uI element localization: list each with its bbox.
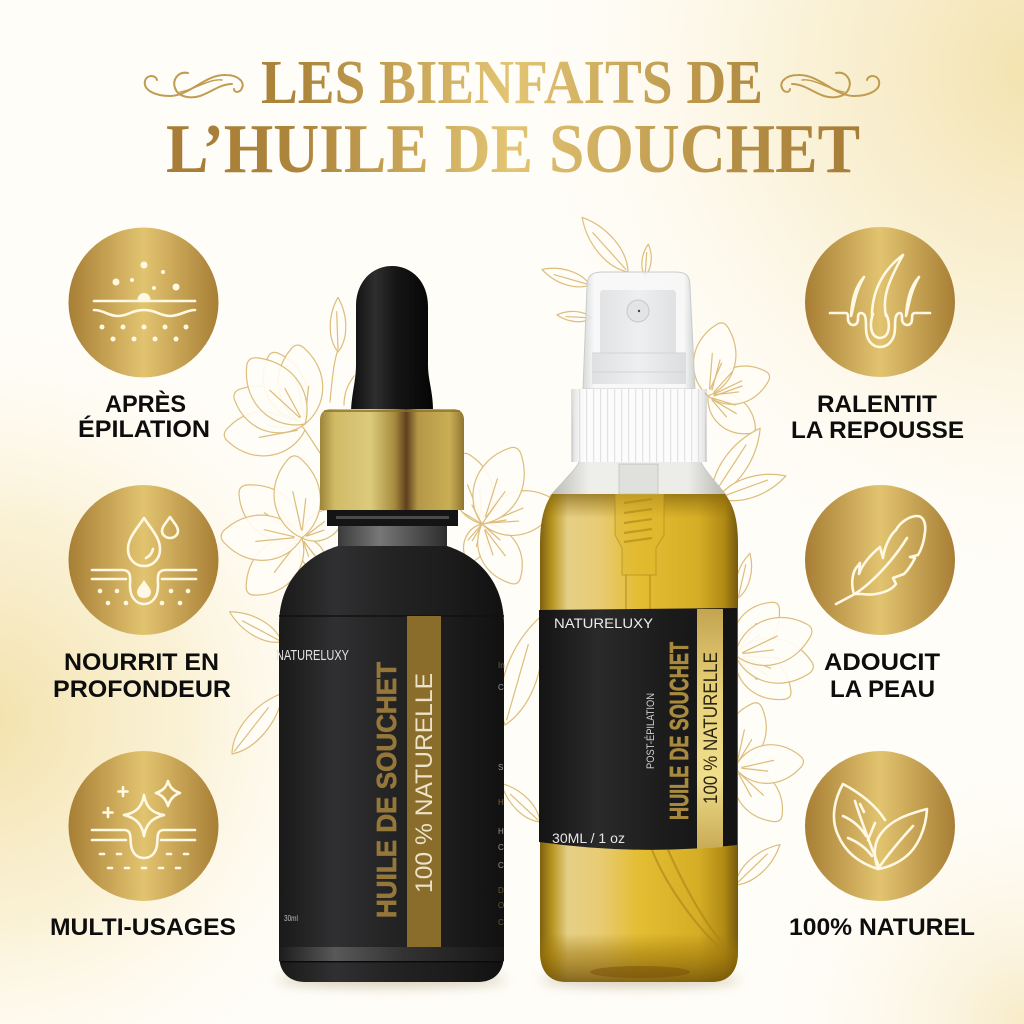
bottle text: 30ml (284, 914, 298, 923)
benefit: 100% naturel (789, 751, 975, 941)
icon: skin with pores (68, 228, 218, 378)
bottle shadows (277, 973, 740, 987)
title (166, 49, 860, 188)
label: ÉPILATION (78, 415, 210, 443)
icon: oil drops (68, 485, 218, 635)
flower: middle centre (444, 438, 562, 593)
label text (552, 615, 722, 846)
icon: feather (805, 485, 955, 635)
label (53, 649, 231, 703)
gold collar (320, 409, 464, 510)
flower: middle left (220, 454, 350, 608)
label text: 30ML / 1 oz (552, 830, 625, 846)
label (791, 391, 964, 444)
label: PROFONDEUR (53, 676, 231, 703)
bottle text: D (498, 886, 504, 895)
label: RALENTIT (817, 391, 937, 418)
bottle text: In (498, 661, 505, 670)
bottle text: HUILE DE SOUCHET (371, 662, 402, 918)
bottle text (276, 647, 505, 927)
label text: HUILE DE SOUCHET (664, 642, 694, 820)
benefit: ralentit la repousse (791, 227, 964, 444)
icon: hair follicles (805, 227, 955, 377)
bottle text: H (498, 798, 504, 807)
flower: lower right lower (716, 696, 805, 832)
ornament: right flourish (781, 73, 879, 97)
floral line art behind bottles (220, 211, 819, 891)
bottle text: 100 % NATURELLE (411, 673, 438, 893)
ribbed collar (571, 389, 707, 462)
leaves: right of spray (702, 421, 789, 600)
label: LA PEAU (830, 676, 935, 703)
leaves: lower right and lower left (223, 604, 786, 891)
dropper bulb (351, 266, 433, 410)
bottle text: C (498, 861, 504, 870)
neck (327, 510, 458, 548)
ornament: left flourish (145, 73, 243, 97)
benefit: après épilation (68, 228, 218, 443)
bottle: black dropper (276, 266, 505, 982)
label (824, 649, 940, 703)
flower: upper left (223, 297, 354, 458)
bottle text: C (498, 918, 504, 927)
bottle text: C (498, 843, 504, 852)
title: L’HUILE DE SOUCHET (166, 111, 860, 188)
bottle text: C (498, 683, 504, 692)
label: ADOUCIT (824, 649, 940, 676)
gold stripe (407, 616, 441, 947)
oil body (540, 494, 738, 982)
leaves: top of spray (540, 211, 653, 323)
black label (539, 608, 737, 850)
icon: sparkles and skin (68, 751, 218, 901)
label text: POST-ÉPILATION (644, 693, 657, 769)
benefit: adoucit la peau (805, 485, 955, 703)
benefit: nourrit en profondeur (53, 485, 231, 703)
bottle body (279, 546, 504, 982)
clear shoulder (550, 460, 727, 496)
label (78, 390, 210, 443)
label: NOURRIT EN (64, 649, 219, 676)
flower: lower right upper (720, 592, 819, 712)
bottle: spray (539, 272, 738, 982)
gold stripe (697, 609, 723, 849)
label: MULTI-USAGES (50, 914, 236, 941)
title: LES BIENFAITS DE (261, 49, 763, 117)
benefit: multi-usages (50, 751, 236, 941)
bottle text: O (498, 901, 504, 910)
icon: leaves (805, 751, 955, 901)
clear cap (583, 272, 695, 389)
label: 100% NATUREL (789, 914, 975, 941)
bottle text: S (498, 763, 503, 772)
dip tube and pump (615, 464, 726, 950)
label text: 100 % NATURELLE (701, 652, 722, 804)
bottle text: H (498, 827, 504, 836)
flower: right of spray (687, 319, 775, 444)
label: LA REPOUSSE (791, 417, 964, 444)
actuator (592, 290, 686, 384)
label text: NATURELUXY (554, 615, 654, 631)
bottle text: NATURELUXY (276, 647, 349, 664)
label: APRÈS (105, 390, 186, 418)
